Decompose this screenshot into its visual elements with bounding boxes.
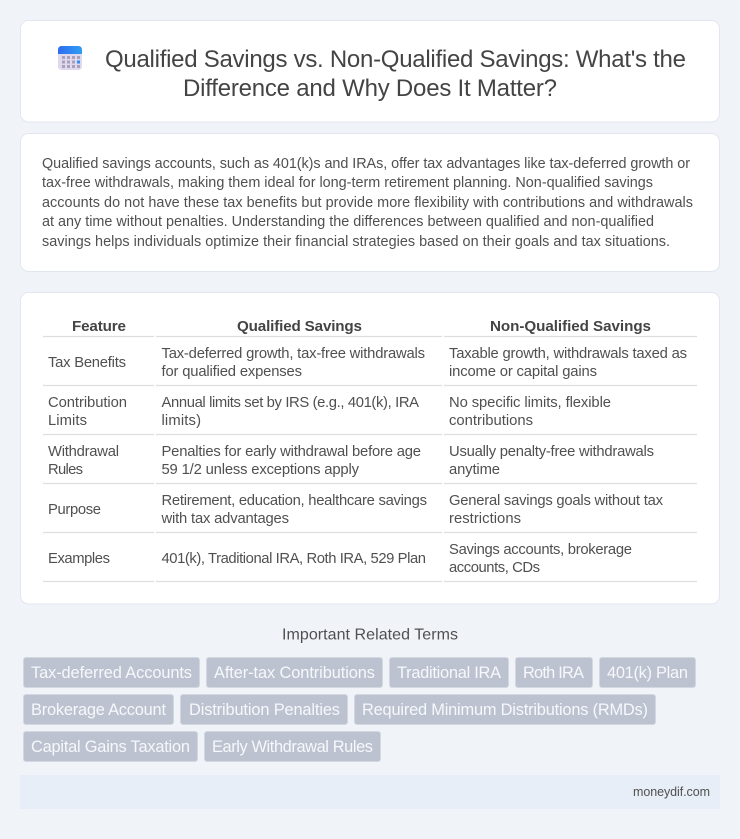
heading: important related terms: Important Related Terms [282, 626, 458, 644]
tag: Distribution Penalties [180, 694, 348, 724]
tag: Brokerage Account: Brokerage Account [31, 701, 166, 719]
tag: Roth IRA [516, 658, 592, 688]
table row: tax benefits: income or capital gains [449, 364, 597, 380]
table row: purpose: Purpose [48, 502, 101, 518]
panel: introduction [20, 134, 720, 272]
title [105, 46, 686, 102]
text block: introduction paragraph: at any time without penalties. Understanding the differences between qualified and non-qualified [42, 214, 654, 230]
tag: Required Minimum Distributions [354, 694, 656, 724]
title: Qualified Savings vs. Non-Qualified Savings: What's the [105, 46, 686, 73]
text block: introduction paragraph: savings helps individuals optimize their financial strategies based on their goals and tax situations. [42, 234, 670, 250]
tag: Capital Gains Taxation [24, 732, 198, 762]
table header row: Qualified Savings [237, 318, 362, 335]
panel: comparison table [20, 292, 720, 604]
table row: contribution limits: Contribution [48, 395, 127, 411]
table row: tax benefits: for qualified expenses [162, 364, 302, 380]
table row: contribution limits: No specific limits, flexible [449, 395, 611, 411]
table row: purpose [43, 493, 697, 532]
table row: withdrawal rules: Usually penalty-free withdrawals [449, 444, 654, 460]
table row: purpose: General savings goals without tax [449, 493, 664, 509]
tag: 401(k) Plan: 401(k) Plan [607, 664, 688, 682]
text block: introduction paragraph: Qualified savings accounts, such as 401(k)s and IRAs, offer tax advantages like tax-deferred growth or [42, 156, 690, 172]
tag: Traditional IRA: Traditional IRA [397, 664, 501, 682]
table row: contribution limits: contributions [449, 413, 533, 429]
table row: tax benefits: Tax-deferred growth, tax-free withdrawals [162, 346, 425, 362]
table row: purpose: Retirement, education, healthcare savings [162, 493, 427, 509]
tag: Early Withdrawal Rules [204, 732, 380, 762]
table row: contribution limits [43, 395, 697, 434]
table row: tax benefits [43, 346, 697, 386]
panel: header card [20, 20, 720, 122]
table row: tax benefits: Taxable growth, withdrawals taxed as [449, 346, 687, 362]
table row: withdrawal rules: anytime [449, 462, 500, 478]
table row: examples: 401(k), Traditional IRA, Roth IRA, 529 Plan [162, 551, 426, 567]
tag: Early Withdrawal Rules: Early Withdrawal Rules [212, 738, 373, 756]
table header row: Non-Qualified Savings [490, 318, 651, 335]
table row: purpose: restrictions [449, 511, 521, 527]
tag: Traditional IRA [390, 658, 508, 688]
tag: 401(k) Plan [600, 658, 696, 688]
table row: purpose: with tax advantages [160, 511, 289, 527]
table row: examples: accounts, CDs [449, 560, 540, 576]
table row: examples: Examples [48, 551, 110, 567]
table row: contribution limits: limits) [162, 413, 201, 429]
tag: After-tax Contributions [206, 658, 382, 688]
footer bar: moneydif.com [633, 785, 710, 799]
text block: introduction paragraph: tax-free withdrawals, making them ideal for long-term retirement planning. Non-qualified savings [42, 175, 653, 191]
icon: calendar [58, 46, 82, 70]
tag: Required Minimum Distributions: Required Minimum Distributions (RMDs) [362, 701, 648, 719]
footer bar [20, 775, 720, 809]
table row: contribution limits: Limits [48, 413, 87, 429]
table row: contribution limits: Annual limits set by IRS (e.g., 401(k), IRA [162, 395, 419, 411]
tag: Tax-deferred Accounts: Tax-deferred Accounts [31, 664, 192, 682]
related term tags [24, 658, 696, 762]
table row: examples: Savings accounts, brokerage [449, 542, 632, 558]
table row: withdrawal rules: Penalties for early withdrawal before age [162, 444, 421, 460]
table row: withdrawal rules: Rules [48, 462, 83, 478]
tag: Roth IRA: Roth IRA [523, 664, 584, 682]
table row: withdrawal rules: 59 1/2 unless exceptions apply [162, 462, 360, 478]
tag: After-tax Contributions: After-tax Contributions [214, 664, 375, 682]
text block: introduction paragraph [42, 156, 693, 250]
table row: withdrawal rules [43, 444, 697, 484]
tag: Tax-deferred Accounts [24, 658, 200, 688]
table header row [43, 318, 697, 336]
tag: Distribution Penalties: Distribution Penalties [189, 701, 340, 719]
tag: Brokerage Account [24, 694, 174, 724]
text block: introduction paragraph: accounts do not have these tax benefits but provide more flexibility with contributions and withdrawals [42, 195, 693, 211]
title: Difference and Why Does It Matter? [183, 75, 557, 102]
table row: withdrawal rules: Withdrawal [48, 444, 119, 460]
table row: tax benefits: Tax Benefits [48, 355, 126, 371]
tag: Capital Gains Taxation: Capital Gains Taxation [31, 738, 190, 756]
table header row: Feature [72, 318, 126, 335]
table row: examples [43, 542, 697, 582]
